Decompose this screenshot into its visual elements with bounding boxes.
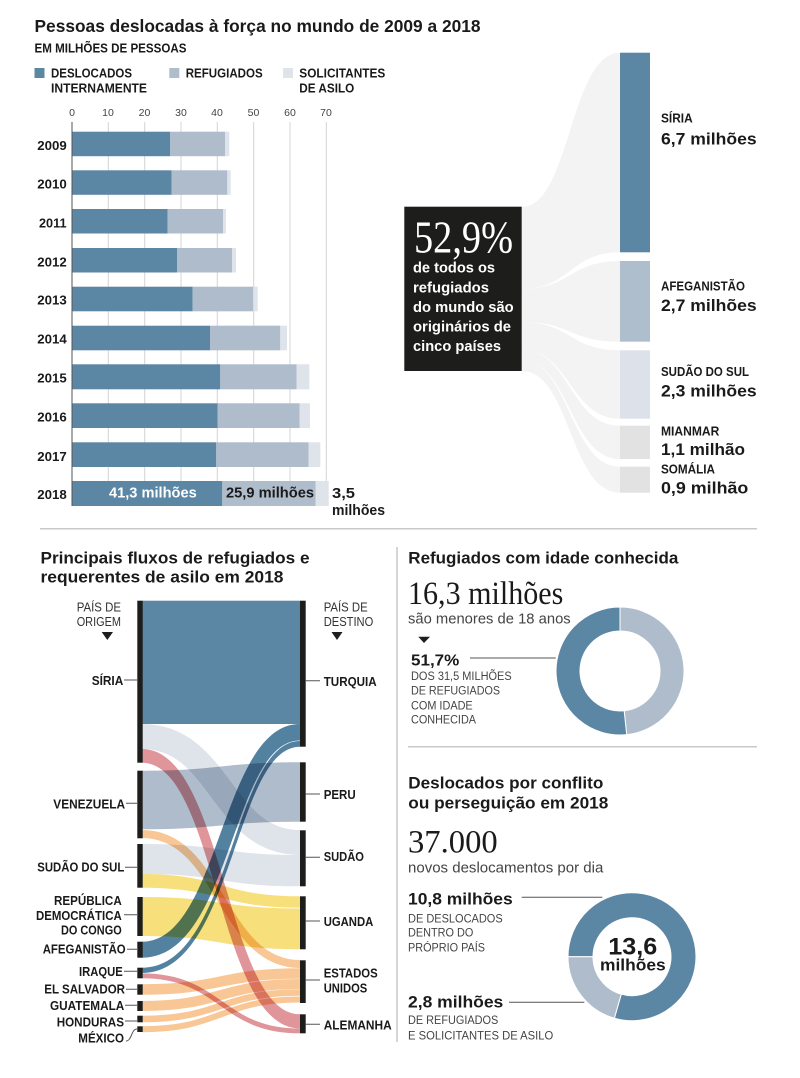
destination labels: ESTADOS bbox=[324, 966, 378, 980]
bar 2014 bbox=[37, 326, 287, 350]
header: país de destino bbox=[324, 600, 374, 640]
label: Somália bbox=[661, 461, 748, 497]
flow: El Salvador to Estados Unidos bbox=[142, 974, 300, 990]
callout: 2,8 milhões bbox=[408, 993, 584, 1042]
legend item: solicitantes de asilo: SOLICITANTES bbox=[299, 66, 385, 80]
bar 2016 bbox=[37, 403, 310, 428]
donut chart: idade conhecida bbox=[556, 607, 684, 735]
bar 2015 bbox=[37, 364, 309, 389]
donut chart: 13,6 milhões: milhões bbox=[600, 956, 666, 975]
axis labels: 60 bbox=[284, 107, 296, 119]
legend bbox=[34, 66, 385, 95]
destination labels: UNIDOS bbox=[324, 981, 367, 995]
heading: ou perseguição em 2018 bbox=[408, 793, 608, 812]
destination labels: PERU bbox=[324, 788, 356, 802]
heading: principais fluxos: requerentes de asilo em 2018 bbox=[40, 568, 284, 587]
label: Síria: SÍRIA bbox=[661, 111, 693, 126]
callout: 51,7%: CONHECIDA bbox=[411, 714, 476, 726]
callout: 10,8 milhões: DENTRO DO bbox=[408, 928, 473, 940]
donut chart: 13,6 milhões bbox=[568, 893, 696, 1021]
label: Mianmar: 1,1 milhão bbox=[661, 440, 745, 459]
callout: 2,8 milhões: DE REFUGIADOS bbox=[408, 1015, 499, 1027]
origin labels: GUATEMALA bbox=[50, 999, 124, 1013]
flow: Afeganistão bbox=[522, 261, 620, 342]
origin bars bbox=[137, 601, 143, 1032]
callout: 51,7%: COM IDADE bbox=[411, 700, 473, 712]
title: Pessoas deslocadas à força no mundo de 2009 a 2018 bbox=[34, 16, 481, 36]
label: Somália: 0,9 milhão bbox=[661, 478, 748, 497]
flow: Venezuela to Peru bbox=[142, 762, 300, 829]
bar 2013 bbox=[37, 287, 258, 311]
flows into Sudão bbox=[142, 736, 300, 886]
bar chart: pessoas deslocadas 2009-2018 bbox=[37, 107, 385, 519]
axis labels: 40 bbox=[211, 107, 223, 119]
callout: 52,9%: cinco países bbox=[413, 339, 501, 355]
label: Afeganistão bbox=[661, 279, 757, 315]
label: Mianmar bbox=[661, 425, 745, 459]
callout: 52,9%: de todos os bbox=[413, 260, 495, 276]
callout: 10,8 milhões: DE DESLOCADOS bbox=[408, 913, 503, 925]
callout: 51,7%: 51,7% bbox=[411, 652, 459, 669]
flow: Iraque to Turquia bbox=[142, 741, 300, 973]
callout: 10,8 milhões: PRÓPRIO PAÍS bbox=[408, 942, 485, 955]
sankey: origem e destino dos refugiados bbox=[36, 600, 392, 1046]
callout: 2,8 milhões: 2,8 milhões bbox=[408, 993, 503, 1012]
flow: Síria bbox=[522, 53, 620, 289]
destination bars bbox=[300, 601, 306, 1033]
origin labels: DEMOCRÁTICA bbox=[36, 908, 122, 923]
flow: México to Estados Unidos bbox=[142, 1000, 300, 1029]
flow: Venezuela to Estados Unidos bbox=[142, 834, 300, 964]
heading: principais fluxos bbox=[40, 548, 310, 587]
sankey: cinco países de origem bbox=[522, 53, 757, 497]
axis labels: 70 bbox=[320, 107, 332, 119]
bar: Mianmar bbox=[620, 426, 650, 459]
bar 2018: 2018 bbox=[37, 487, 67, 502]
origin labels: DO CONGO bbox=[61, 923, 122, 937]
axis labels bbox=[69, 107, 332, 119]
subtext: são menores de 18 anos bbox=[408, 610, 571, 627]
label: Sudão do Sul: SUDÃO DO SUL bbox=[661, 364, 749, 379]
bar: Sudão do Sul bbox=[620, 350, 650, 419]
legend item: deslocados internamente: DESLOCADOS bbox=[51, 66, 132, 80]
bar 2011 bbox=[39, 209, 226, 234]
origin labels: MÉXICO bbox=[78, 1031, 124, 1046]
flow: Mianmar bbox=[522, 350, 620, 459]
axis labels: 0 bbox=[69, 107, 75, 119]
bar 2014: 2014 bbox=[37, 332, 68, 346]
big number: 16,3 milhões bbox=[408, 576, 563, 612]
bar 2012 bbox=[37, 248, 236, 272]
header: país de destino: PAÍS DE bbox=[324, 600, 368, 615]
legend item: solicitantes de asilo bbox=[283, 66, 385, 95]
flows into Uganda bbox=[142, 874, 300, 949]
bar 2018: 25,9 milhões bbox=[226, 486, 314, 502]
bar 2011: 2011 bbox=[39, 216, 66, 230]
big number: 37.000 bbox=[408, 825, 498, 861]
bar 2010 bbox=[37, 170, 231, 195]
label: Mianmar: MIANMAR bbox=[661, 425, 719, 439]
bar 2017: 2017 bbox=[37, 449, 67, 464]
heading: Refugiados com idade conhecida bbox=[408, 548, 679, 567]
origin labels: SUDÃO DO SUL bbox=[37, 860, 125, 875]
subtext: novos deslocamentos por dia bbox=[408, 859, 604, 876]
label: Afeganistão: 2,7 milhões bbox=[661, 296, 757, 315]
flow: Somália bbox=[522, 361, 620, 493]
origin labels: AFEGANISTÃO bbox=[43, 941, 126, 956]
origin labels: HONDURAS bbox=[57, 1016, 124, 1030]
callout: 52,9%: 52,9% bbox=[414, 212, 513, 263]
callout: 52,9%: originários de bbox=[413, 320, 511, 336]
bar 2017 bbox=[37, 442, 320, 467]
flow: RDC to Uganda bbox=[142, 897, 300, 949]
destination labels: UGANDA bbox=[324, 915, 373, 929]
panel: deslocados por conflito bbox=[408, 773, 696, 1042]
axis labels: 10 bbox=[102, 107, 114, 119]
flows into Estados Unidos bbox=[142, 974, 300, 1029]
subtitle: EM MILHÕES DE PESSOAS bbox=[34, 40, 186, 56]
label: Síria bbox=[661, 111, 757, 148]
label: Sudão do Sul bbox=[661, 364, 757, 400]
callout: 52,9% bbox=[404, 207, 522, 371]
destination labels: SUDÃO bbox=[324, 849, 364, 864]
callout: 10,8 milhões: 10,8 milhões bbox=[408, 889, 513, 908]
origin labels: EL SALVADOR bbox=[44, 982, 125, 996]
destination labels: TURQUIA bbox=[324, 675, 377, 689]
flow: Iraque to Alemanha bbox=[142, 976, 300, 1031]
axis labels: 30 bbox=[175, 107, 187, 119]
donut chart: 13,6 milhões: 13,6 bbox=[608, 933, 657, 960]
bar 2013: 2013 bbox=[37, 292, 67, 308]
flow: Guatemala to Estados Unidos bbox=[142, 984, 300, 1006]
flow: Sudão do Sul bbox=[522, 322, 620, 419]
destination labels: ALEMANHA bbox=[324, 1018, 392, 1032]
bar: Afeganistão bbox=[620, 261, 650, 342]
callout: 52,9%: refugiados bbox=[413, 281, 489, 297]
flow: Honduras to Estados Unidos bbox=[142, 992, 300, 1019]
legend item: refugiados: REFUGIADOS bbox=[186, 66, 263, 80]
callout: 10,8 milhões bbox=[408, 889, 602, 955]
bar 2018 bbox=[37, 481, 385, 519]
heading: Deslocados por conflito bbox=[408, 773, 603, 792]
bar: Somália bbox=[620, 467, 650, 493]
heading bbox=[408, 773, 608, 812]
flow: Síria to Sudão bbox=[142, 736, 300, 842]
bar 2012: 2012 bbox=[37, 254, 67, 270]
bar 2018: 41,3 milhões bbox=[109, 486, 197, 502]
label: Sudão do Sul: 2,3 milhões bbox=[661, 381, 757, 400]
bar: Síria bbox=[620, 53, 650, 252]
legend item: solicitantes de asilo: DE ASILO bbox=[299, 81, 355, 95]
origin labels: SÍRIA bbox=[92, 673, 123, 688]
callout: 51,7%: DOS 31,5 MILHÕES bbox=[411, 670, 512, 683]
header: país de origem: ORIGEM bbox=[77, 615, 121, 629]
bar 2015: 2015 bbox=[37, 370, 67, 386]
header: país de origem: PAÍS DE bbox=[77, 600, 121, 615]
header: país de destino: DESTINO bbox=[324, 615, 374, 629]
bar 2010: 2010 bbox=[37, 176, 67, 192]
origin labels: REPÚBLICA bbox=[54, 893, 122, 908]
bar 2009: 2009 bbox=[37, 138, 67, 153]
origin labels: VENEZUELA bbox=[53, 797, 125, 811]
legend item: deslocados internamente bbox=[34, 66, 147, 95]
label: Síria: 6,7 milhões bbox=[661, 129, 757, 148]
origin labels: IRAQUE bbox=[79, 965, 123, 979]
bar 2009 bbox=[37, 132, 229, 156]
flow: Afeganistão to Turquia bbox=[142, 724, 300, 958]
heading: principais fluxos: Principais fluxos de refugiados e bbox=[40, 548, 310, 567]
callout: 2,8 milhões: E SOLICITANTES DE ASILO bbox=[408, 1030, 553, 1042]
bar 2016: 2016 bbox=[37, 410, 67, 424]
bar 2018: 3,5 bbox=[332, 486, 355, 502]
flow: Síria to Alemanha bbox=[142, 749, 300, 1028]
callout: 51,7% bbox=[411, 652, 556, 726]
flow: Síria to Turquia bbox=[142, 601, 300, 724]
panel: refugiados com idade conhecida bbox=[408, 548, 684, 735]
axis labels: 20 bbox=[139, 107, 150, 119]
pointer triangle bbox=[418, 637, 430, 643]
label: Afeganistão: AFEGANISTÃO bbox=[661, 279, 745, 294]
legend item: deslocados internamente: INTERNAMENTE bbox=[51, 81, 147, 95]
callout: 51,7%: DE REFUGIADOS bbox=[411, 686, 500, 698]
flow: Sudão do Sul to Uganda bbox=[142, 874, 300, 908]
origin labels bbox=[36, 673, 137, 1046]
callout: 52,9%: do mundo são bbox=[413, 300, 514, 316]
flow: Sudão do Sul to Sudão bbox=[142, 844, 300, 886]
axis labels: 50 bbox=[248, 107, 259, 119]
bar 2018: milhões bbox=[332, 503, 385, 519]
label: Somália: SOMÁLIA bbox=[661, 461, 715, 476]
destination labels bbox=[306, 675, 392, 1032]
header: país de origem bbox=[77, 600, 121, 640]
